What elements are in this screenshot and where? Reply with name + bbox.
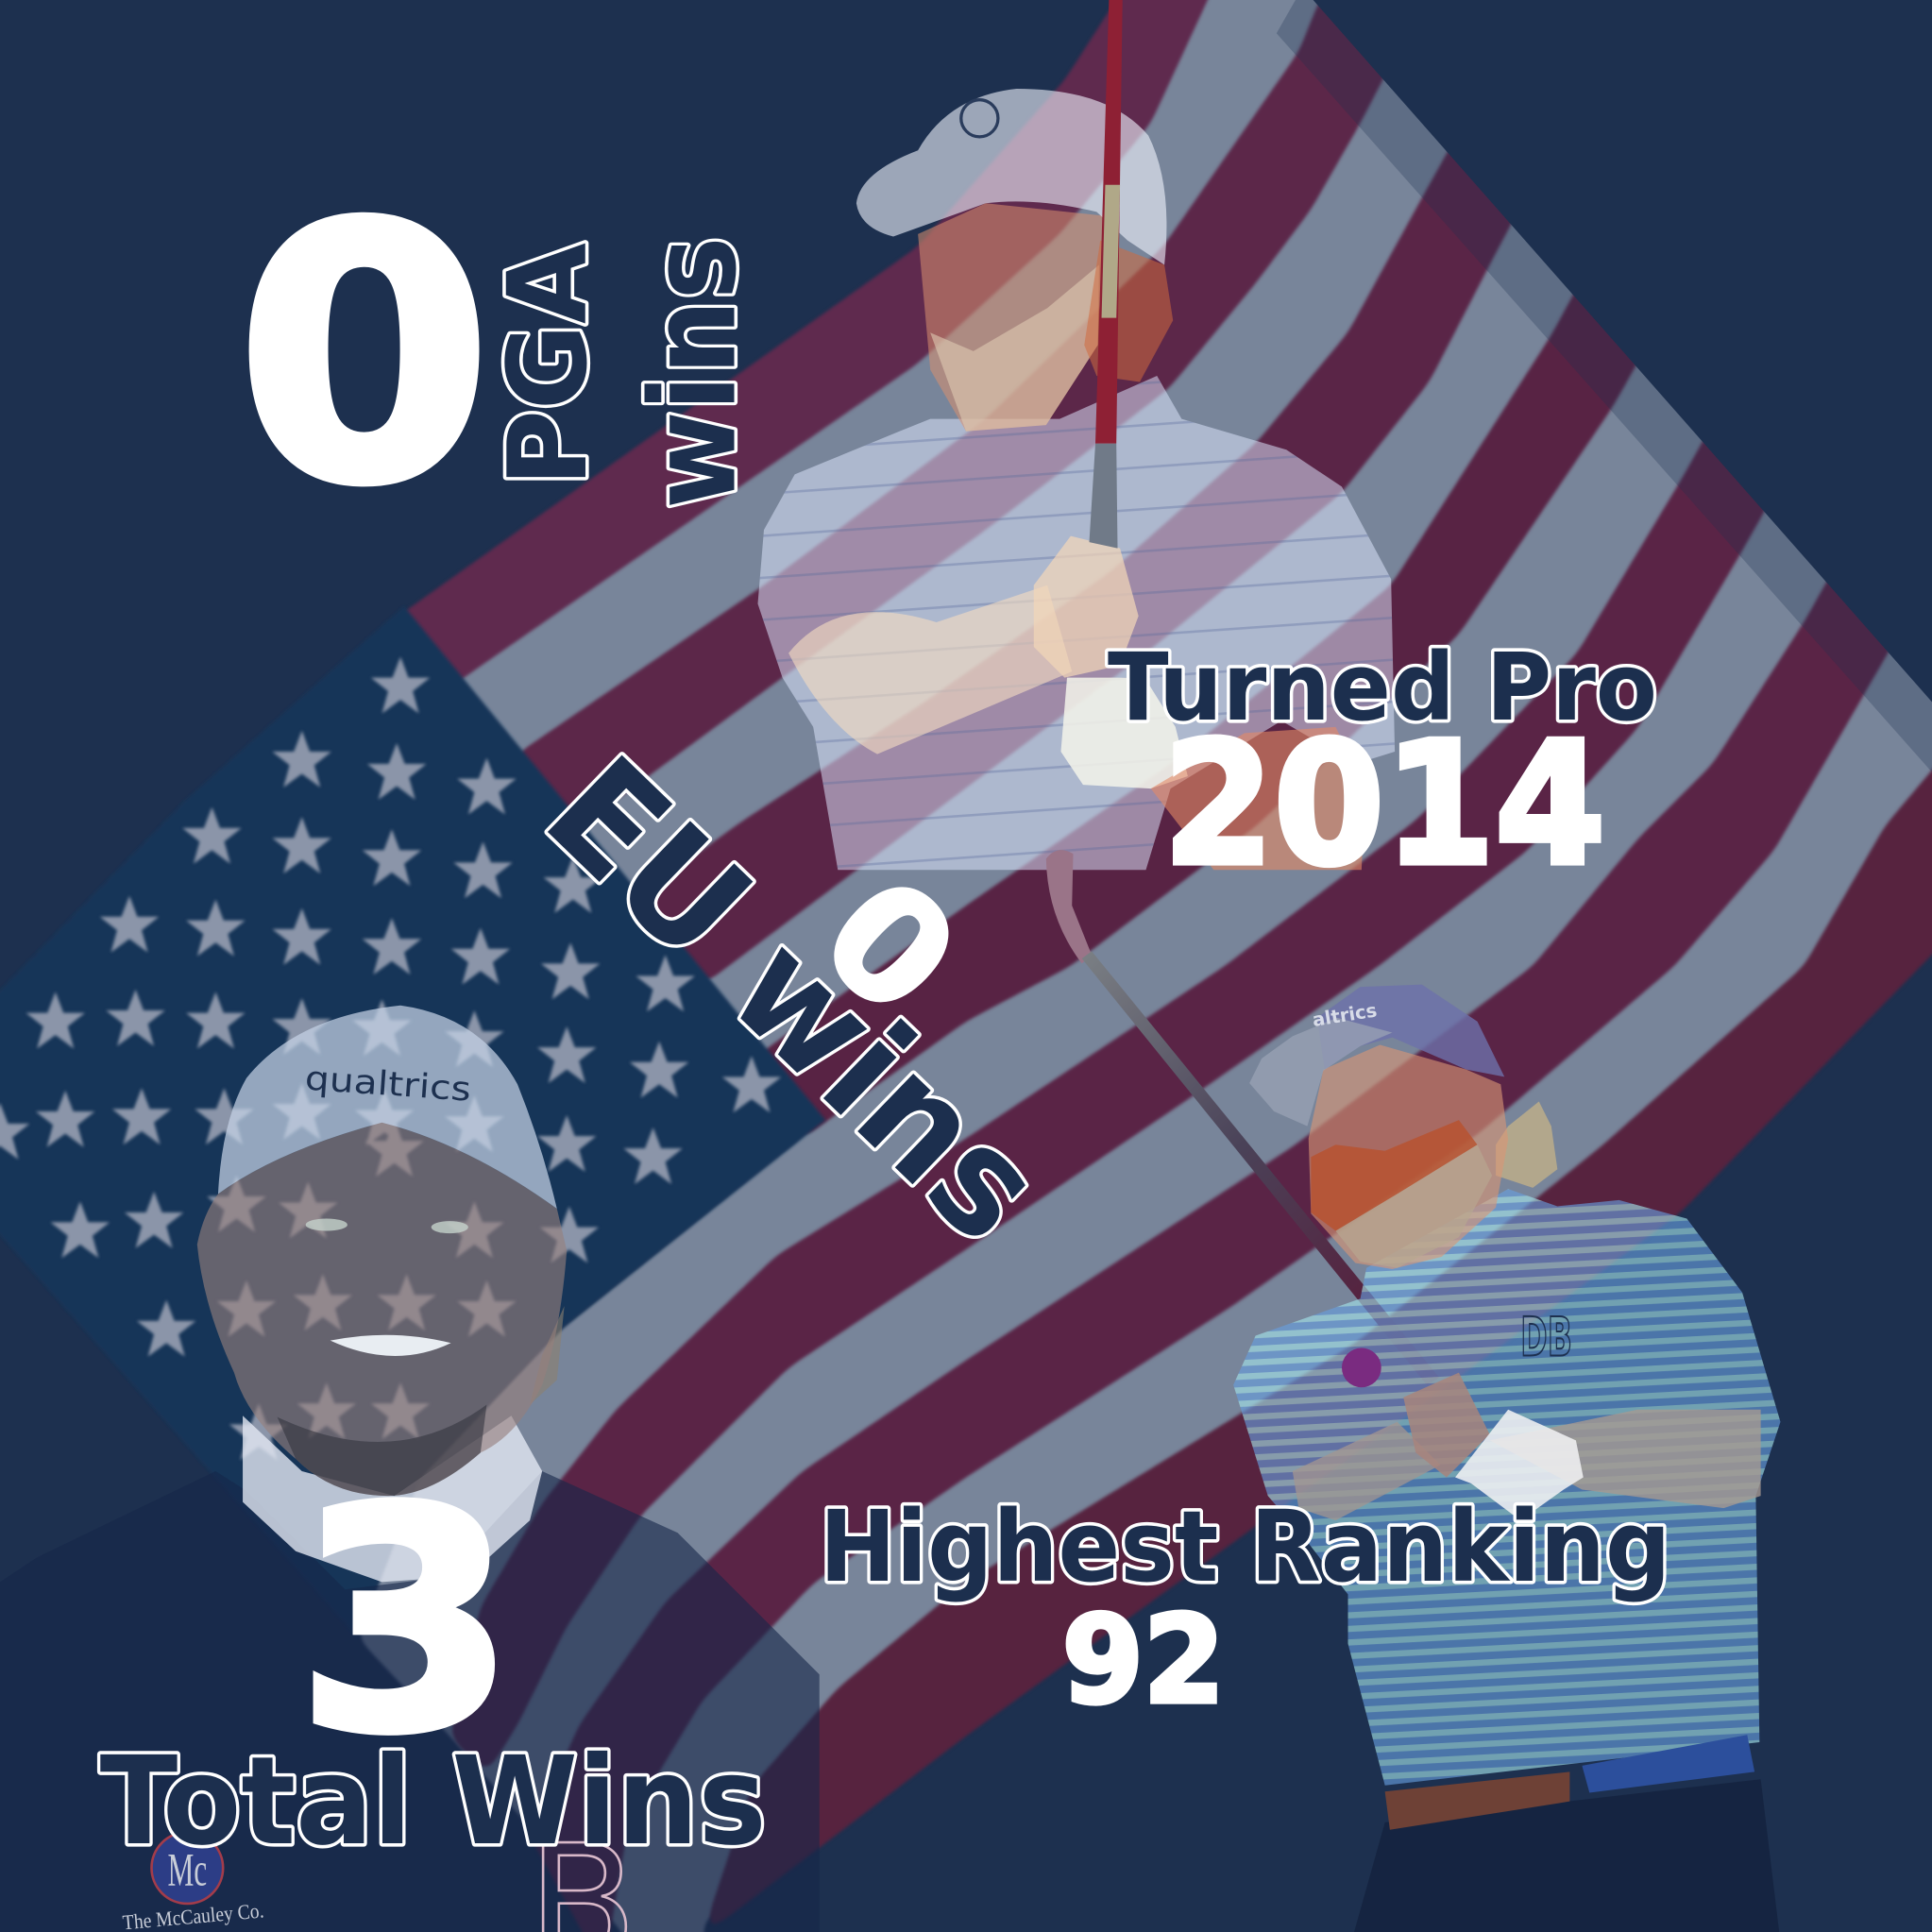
- bottom right golfer: [1233, 985, 1781, 1932]
- cap: [218, 1006, 557, 1209]
- flag hem shadow: [1277, 0, 1932, 797]
- sleeve logo: [1342, 1348, 1381, 1387]
- cap: [856, 89, 1166, 265]
- cap logo: [961, 100, 998, 137]
- shirt: [757, 376, 1395, 870]
- shirt pinstripes: [757, 376, 1395, 870]
- right forearm: [1490, 1410, 1761, 1508]
- chest logo: DB: [1520, 1305, 1572, 1368]
- year 2014: 2014: [1163, 706, 1605, 903]
- fly corner background: [1311, 0, 1932, 704]
- cap text: qualtrics: [304, 1059, 472, 1110]
- red stripe 7: [690, 690, 1932, 1932]
- face: [918, 203, 1103, 432]
- forearm: [788, 585, 1072, 754]
- club grip: [1089, 444, 1117, 549]
- club shaft: [1095, 0, 1123, 444]
- top right golfer: [757, 0, 1395, 870]
- face: [197, 1123, 567, 1496]
- number 3: 3: [296, 1445, 517, 1800]
- stat: turned pro: [1108, 634, 1657, 903]
- belt: [1385, 1771, 1569, 1830]
- bottom left golfer: [0, 1006, 820, 1932]
- logo disc: [151, 1832, 223, 1904]
- shirt torso: [1233, 1189, 1781, 1786]
- flag canton: [0, 606, 825, 1637]
- cap text: altrics: [1311, 999, 1379, 1031]
- hands: [1034, 536, 1139, 678]
- club head: [1046, 850, 1092, 963]
- label highest ranking: Highest Ranking: [820, 1489, 1670, 1604]
- glove: [1455, 1410, 1584, 1520]
- hair patch: [530, 1306, 565, 1405]
- beard red: [1311, 1120, 1478, 1231]
- smile: [330, 1335, 451, 1356]
- number 0 rotated: 0: [788, 846, 990, 1049]
- shaft band: [1102, 185, 1120, 318]
- hand: [1403, 1373, 1490, 1478]
- club shaft: [1082, 951, 1439, 1385]
- beard grey: [1335, 1144, 1492, 1268]
- head: [1309, 1045, 1508, 1269]
- red stripe 4: [752, 265, 1651, 1140]
- hair: [1496, 1102, 1557, 1188]
- hair and ear: [1084, 240, 1173, 382]
- collar: [243, 1415, 542, 1582]
- label EU wins: EU wins: [515, 725, 1075, 1275]
- chin shadow: [278, 1405, 486, 1496]
- glove: [1060, 678, 1188, 788]
- label turned pro: Turned Pro: [1108, 634, 1657, 742]
- stat: total wins: [100, 1445, 767, 1873]
- red stripe 3: [635, 129, 1525, 986]
- label total wins: Total Wins: [100, 1731, 767, 1873]
- red stripe 1: [384, 0, 1225, 690]
- stat: 0 PGA wins: [237, 153, 763, 560]
- canton stars: [0, 656, 781, 1460]
- blue belt: [1582, 1735, 1754, 1793]
- label PGA: PGA: [485, 243, 612, 486]
- lower arm: [1151, 727, 1365, 870]
- cap crown: [1317, 985, 1504, 1076]
- trousers: [1354, 1779, 1779, 1932]
- red stripe 2: [512, 0, 1392, 832]
- cap visor: [1249, 1018, 1392, 1127]
- stat: highest ranking: [820, 1489, 1670, 1731]
- beard: [930, 265, 1099, 432]
- sweater: [0, 1471, 820, 1932]
- number 0: 0: [237, 153, 492, 560]
- red stripe 5: [449, 413, 1781, 1774]
- lower club: [1046, 850, 1439, 1385]
- logo letters: Mc: [167, 1843, 207, 1895]
- stat: EU wins: [515, 725, 1075, 1275]
- value 92: 92: [1062, 1590, 1225, 1731]
- red stripe 6: [530, 554, 1904, 1932]
- McCauley logo: [151, 1832, 223, 1904]
- label wins: wins: [625, 237, 763, 509]
- eyes: [306, 1218, 468, 1233]
- left forearm: [1293, 1422, 1440, 1520]
